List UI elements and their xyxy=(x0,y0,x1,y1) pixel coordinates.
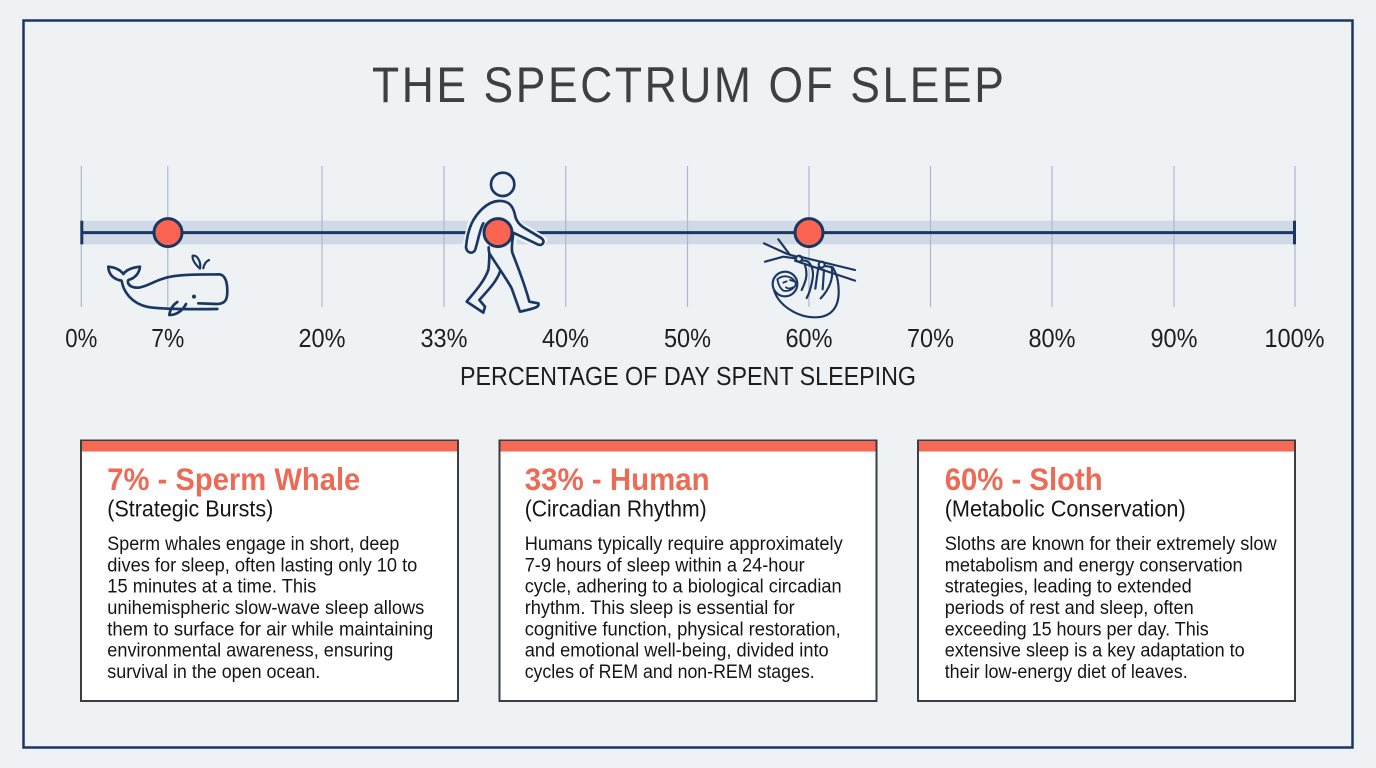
panel: human: 33% - Human xyxy=(525,461,710,497)
axis labels: 33% xyxy=(420,323,468,353)
axis labels: 7% xyxy=(151,323,184,353)
icon: sloth on branch xyxy=(764,239,855,317)
panel: human: Humans typically require approximately xyxy=(525,534,843,555)
panel: human: rhythm. This sleep is essential for xyxy=(525,598,795,619)
panel: sloth xyxy=(918,440,1295,701)
panel: sloth: metabolism and energy conservation xyxy=(945,555,1243,576)
axis labels: 40% xyxy=(542,323,589,353)
panel: sperm whale: 15 minutes at a time. This xyxy=(107,577,316,598)
panel: sloth: 60% - Sloth xyxy=(945,461,1103,497)
axis labels: 20% xyxy=(298,323,346,353)
marker: 33% xyxy=(484,219,512,247)
panel: sloth: periods of rest and sleep, often xyxy=(945,598,1194,619)
panel: sloth: Sloths are known for their extremely slow xyxy=(945,534,1277,555)
panel: sperm whale: them to surface for air while maintaining xyxy=(107,619,433,640)
axis labels: 100% xyxy=(1264,323,1324,353)
panel: sperm whale: (Strategic Bursts) xyxy=(107,496,273,522)
axis labels: 70% xyxy=(907,323,954,353)
panel: sloth: strategies, leading to extended xyxy=(945,577,1192,598)
panel: human: 7-9 hours of sleep within a 24-hour xyxy=(525,555,805,576)
marker: 7% xyxy=(154,219,182,247)
axis labels: 0% xyxy=(65,323,97,353)
icon: sperm whale xyxy=(108,256,227,315)
panel: human: and emotional well-being, divided into xyxy=(525,641,829,662)
axis labels: 80% xyxy=(1028,323,1076,353)
panel: sperm whale: 7% - Sperm Whale xyxy=(107,461,360,497)
panel: sperm whale: unihemispheric slow-wave sleep allows xyxy=(107,598,424,619)
panel: sperm whale: survival in the open ocean. xyxy=(107,662,320,683)
axis labels: 60% xyxy=(786,323,832,353)
icon: walking human xyxy=(466,173,543,313)
panel: sloth: their low-energy diet of leaves. xyxy=(945,662,1188,683)
panel: human: cycles of REM and non-REM stages. xyxy=(525,662,815,683)
panel: human: (Circadian Rhythm) xyxy=(525,496,707,522)
title: THE SPECTRUM OF SLEEP xyxy=(372,57,1004,114)
panel: human: cognitive function, physical restoration, xyxy=(525,619,841,640)
axis title: PERCENTAGE OF DAY SPENT SLEEPING xyxy=(460,363,916,391)
panel: sloth: (Metabolic Conservation) xyxy=(945,496,1186,522)
panel: sloth: extensive sleep is a key adaptation to xyxy=(945,641,1245,662)
axis labels: 50% xyxy=(664,323,711,353)
panel: sperm whale: dives for sleep, often lasting only 10 to xyxy=(107,555,417,576)
marker: 60% xyxy=(795,219,823,247)
axis labels: 90% xyxy=(1150,323,1198,353)
panel: sperm whale: environmental awareness, ensuring xyxy=(107,641,393,662)
panel: sperm whale: Sperm whales engage in short, deep xyxy=(107,534,399,555)
axis labels xyxy=(65,323,1324,353)
panel: sloth: exceeding 15 hours per day. This xyxy=(945,619,1209,640)
panel: sperm whale xyxy=(81,440,458,701)
timeline chart xyxy=(81,166,1295,307)
panel: human xyxy=(500,440,876,701)
panel: human: cycle, adhering to a biological circadian xyxy=(525,577,842,598)
